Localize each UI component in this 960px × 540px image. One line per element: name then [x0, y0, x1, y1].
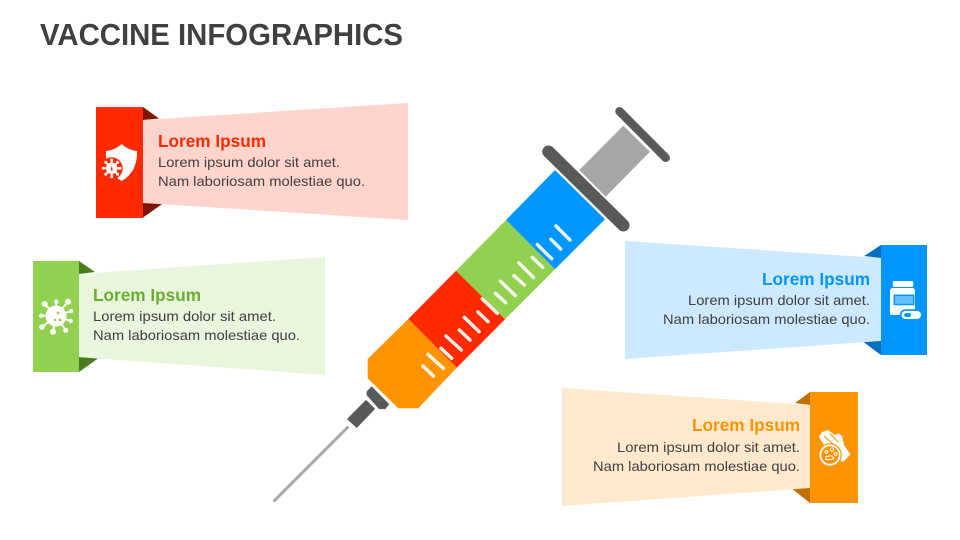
text block: blue	[663, 292, 870, 327]
plunger head	[620, 111, 666, 158]
icon: virus	[39, 299, 73, 335]
text block: red: Lorem ipsum dolor sit amet.	[158, 154, 340, 170]
barrel: red segment	[408, 271, 505, 368]
text block: red	[158, 154, 365, 189]
measurement ticks	[423, 226, 570, 376]
barrel: blue segment	[506, 170, 605, 269]
barrel: green segment	[456, 220, 555, 319]
needle	[274, 426, 348, 502]
barrel: orange segment	[368, 319, 457, 408]
text block: orange: Lorem ipsum dolor sit amet.	[617, 439, 800, 455]
barrel flange	[548, 152, 623, 225]
text block: blue: Lorem ipsum dolor sit amet.	[688, 292, 870, 308]
heading: green: Lorem Ipsum	[93, 285, 201, 305]
icon: shield with virus	[101, 144, 137, 181]
panel: orange card	[562, 388, 858, 506]
text block: green: Nam laboriosam molestiae quo.	[93, 327, 300, 343]
text block: orange: Nam laboriosam molestiae quo.	[593, 458, 800, 474]
panel: red card	[96, 103, 408, 220]
text block: blue: Nam laboriosam molestiae quo.	[663, 311, 870, 327]
heading: orange: Lorem Ipsum	[692, 415, 800, 435]
syringe	[274, 111, 666, 502]
icon: hand with skin rash	[818, 430, 850, 467]
text block: orange	[593, 439, 800, 474]
heading: red: Lorem Ipsum	[158, 131, 266, 151]
panel: green card	[33, 257, 325, 375]
heading: blue: Lorem Ipsum	[762, 269, 870, 289]
panel: blue card	[625, 241, 927, 359]
plunger rod	[579, 126, 650, 197]
text block: green: Lorem ipsum dolor sit amet.	[93, 308, 276, 324]
text block: red: Nam laboriosam molestiae quo.	[158, 173, 365, 189]
icon: medicine bottle and pill	[890, 281, 923, 321]
needle hub	[348, 387, 388, 427]
title: VACCINE INFOGRAPHICS	[40, 18, 403, 52]
text block: green	[93, 308, 300, 343]
